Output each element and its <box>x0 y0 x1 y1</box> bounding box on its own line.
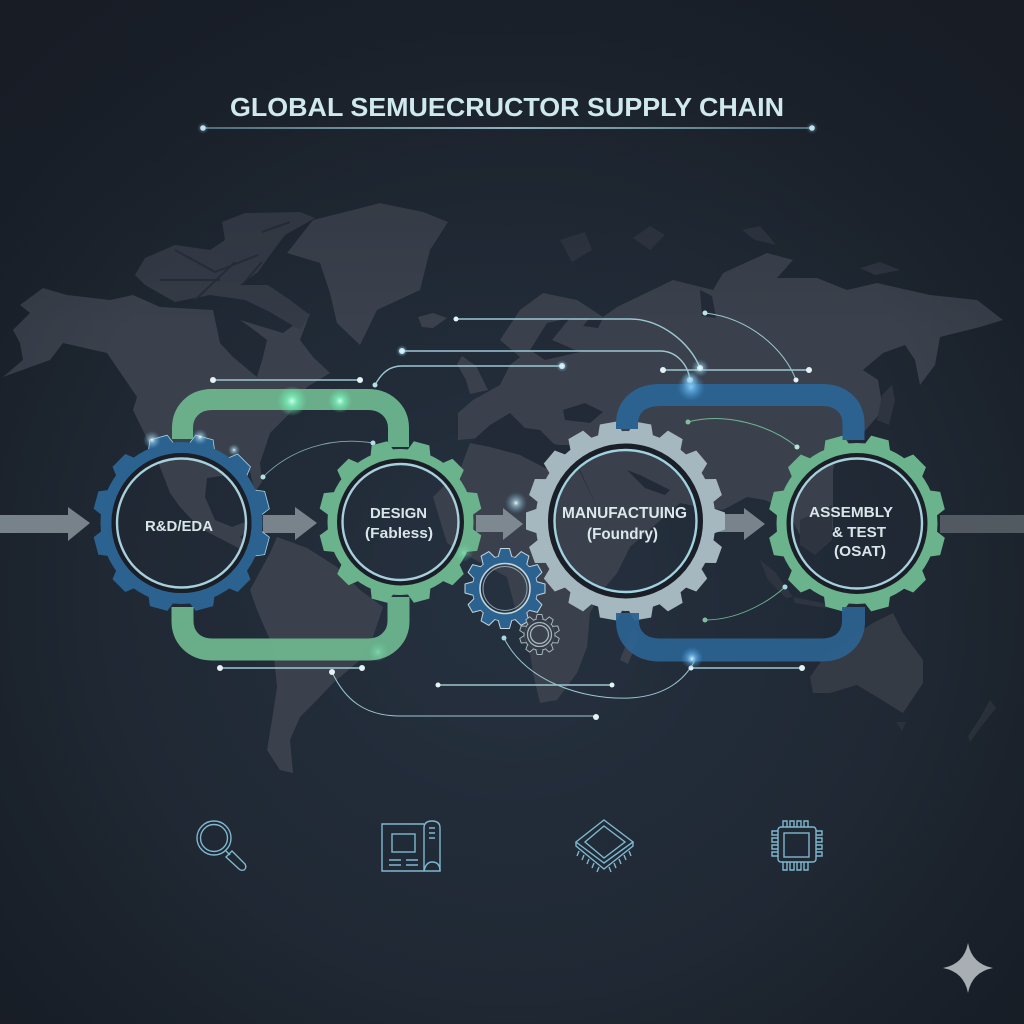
label: and test: & TEST <box>832 524 886 541</box>
label: Manufacturing: MANUFACTUING <box>562 505 687 522</box>
Madagascar <box>620 627 640 664</box>
world map <box>3 203 1003 773</box>
blue top loop <box>627 395 854 440</box>
label: R&D/EDA: R&D/EDA <box>145 518 213 535</box>
seas <box>470 290 716 495</box>
arrow: output <box>940 515 1024 533</box>
green bottom loop <box>182 597 398 650</box>
icon: angled chip <box>576 820 633 872</box>
arrow: input <box>0 507 90 541</box>
gear: Manufacturing <box>526 421 725 621</box>
icon: sparkle <box>943 943 993 993</box>
arrow: manufacturing to assembly <box>716 508 765 540</box>
gear: R&D/EDA <box>93 434 270 612</box>
arrow: design to manufacturing <box>476 508 523 540</box>
gear: Assembly and test <box>768 435 946 612</box>
label: OSAT: (OSAT) <box>834 543 886 560</box>
Australia <box>810 613 923 713</box>
small blue gear <box>465 548 545 628</box>
Greenland <box>287 203 448 345</box>
Iceland <box>418 313 447 328</box>
tiny gear <box>519 614 560 654</box>
Eurasia <box>458 253 1003 547</box>
Africa <box>433 443 630 703</box>
title: GLOBAL SEMUECRUCTOR SUPPLY CHAIN <box>230 92 784 122</box>
glow highlights <box>143 345 709 669</box>
United Kingdom <box>457 356 488 394</box>
Arctic islands <box>135 212 315 330</box>
arrow: R&D to design <box>263 507 317 540</box>
title underline <box>197 122 818 134</box>
connector dots <box>210 310 812 720</box>
Indonesia <box>760 505 832 608</box>
North and Central America <box>3 288 330 552</box>
label: Foundry: (Foundry) <box>587 526 658 543</box>
label: Assembly: ASSEMBLY <box>809 504 893 521</box>
label: Design: DESIGN <box>370 505 427 522</box>
green top loop <box>182 400 398 447</box>
icon: magnifying glass <box>197 821 246 870</box>
South America <box>250 537 383 773</box>
icon: blueprint book <box>382 821 440 871</box>
icon: processor <box>772 821 822 870</box>
label: Fabless: (Fabless) <box>365 525 433 542</box>
blue bottom loop <box>628 607 854 650</box>
flow arrows <box>0 507 1024 541</box>
connector network <box>213 313 809 716</box>
Tasmania and New Zealand <box>896 700 996 742</box>
Arctic Russia and Japan <box>560 226 900 425</box>
gear: Design <box>319 440 482 604</box>
arctic channels <box>160 222 290 300</box>
